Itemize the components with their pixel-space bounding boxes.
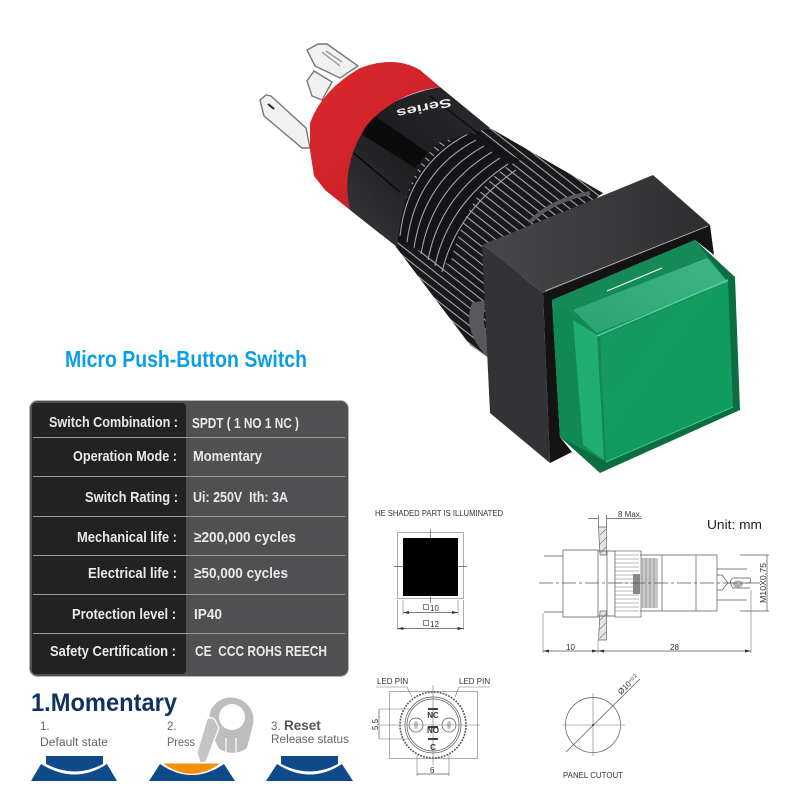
icon: rear terminals — [260, 44, 358, 148]
diagram: side dimensions: M10X0.75 — [759, 562, 768, 603]
diagram: side dimensions: 10 — [566, 643, 575, 652]
icon: green lens — [552, 240, 740, 473]
length dimensions — [543, 590, 751, 653]
row: switch rating: Ui: 250V Ith: 3A — [193, 489, 288, 506]
diagram: illuminated area — [375, 509, 503, 630]
diagram: rear view with pins: 6 — [430, 766, 435, 775]
diagram: rear view with pins: NC — [427, 711, 439, 720]
row: switch combination: SPDT ( 1 NO 1 NC ) — [192, 415, 299, 432]
title: Micro Push-Button Switch — [65, 346, 307, 372]
diagram: rear view with pins — [371, 677, 490, 776]
row: electrical life: ≥50,000 cycles — [194, 565, 288, 582]
panel section — [598, 527, 606, 640]
row: safety certification — [50, 643, 327, 660]
diagram: side dimensions — [539, 510, 769, 653]
terminals — [717, 569, 751, 600]
step 3: reset — [266, 718, 353, 781]
icon: black housing — [482, 175, 714, 463]
step 3: reset: Reset — [284, 718, 321, 733]
row: protection level: Protection level : — [72, 606, 176, 623]
diagram: panel cutout — [562, 672, 640, 780]
diagram: side dimensions: 8 Max. — [618, 510, 642, 519]
heading: momentary: 1.Momentary — [31, 689, 177, 717]
series marking: Series — [395, 95, 453, 121]
step 2: press: Press — [167, 737, 195, 749]
diagram: rear view with pins: LED PIN — [377, 677, 408, 686]
step 2: press — [149, 698, 253, 781]
icon: red collar — [310, 62, 440, 210]
row: electrical life — [88, 565, 288, 582]
icon: button pressed — [149, 764, 235, 781]
step 3: reset: Release status — [271, 734, 349, 746]
diagram: rear view with pins: LED PIN — [459, 677, 490, 686]
unit label: Unit: mm — [707, 517, 762, 532]
step 1: default state: 1. — [40, 721, 50, 733]
panel: specification table — [30, 400, 348, 676]
step 3: reset: 3. — [271, 721, 281, 733]
centre line — [539, 582, 762, 584]
row: switch combination: Switch Combination : — [49, 414, 178, 431]
diagram: panel cutout: +0.2 — [627, 673, 639, 684]
diagram: illuminated area: 12 — [430, 620, 439, 629]
diagram: rear view with pins: NO — [427, 726, 439, 735]
icon: pointing hand — [197, 698, 253, 763]
product photo: green push-button switch — [260, 44, 740, 473]
row: switch combination — [49, 414, 299, 432]
row: protection level: IP40 — [194, 606, 222, 623]
row: mechanical life: ≥200,000 cycles — [194, 529, 296, 546]
row: switch rating — [85, 489, 288, 506]
diagram: illuminated area: 10 — [430, 604, 439, 613]
diagram: rear view with pins: C — [430, 743, 436, 752]
diagram: side dimensions: 28 — [670, 643, 679, 652]
step 1: default state — [31, 721, 117, 781]
row: switch rating: Switch Rating : — [85, 489, 178, 506]
icon: black barrel — [344, 87, 500, 247]
diagram: panel cutout: PANEL CUTOUT — [563, 771, 623, 780]
M10 thread dimension — [740, 555, 769, 611]
row: operation mode: Operation Mode : — [73, 448, 177, 465]
row: operation mode — [73, 448, 263, 465]
step 2: press: 2. — [167, 721, 177, 733]
diagram: rear view with pins: 5.5 — [371, 718, 380, 730]
icon: ribbed threaded section — [385, 128, 603, 357]
row: mechanical life — [77, 529, 296, 546]
body — [544, 550, 615, 617]
row: electrical life: Electrical life : — [88, 565, 177, 582]
icon: button default — [31, 756, 117, 781]
diagram: panel cutout: Ø10 — [616, 679, 633, 696]
row: safety certification: Safety Certification : — [50, 643, 176, 660]
icon: button reset — [266, 756, 353, 781]
row: mechanical life: Mechanical life : — [77, 529, 177, 546]
step 1: default state: Default state — [40, 737, 108, 749]
row: safety certification: CE CCC ROHS REECH — [195, 643, 327, 660]
diagram: illuminated area: HE SHADED PART IS ILLUMINATED — [375, 509, 503, 518]
row: operation mode: Momentary — [193, 448, 263, 465]
